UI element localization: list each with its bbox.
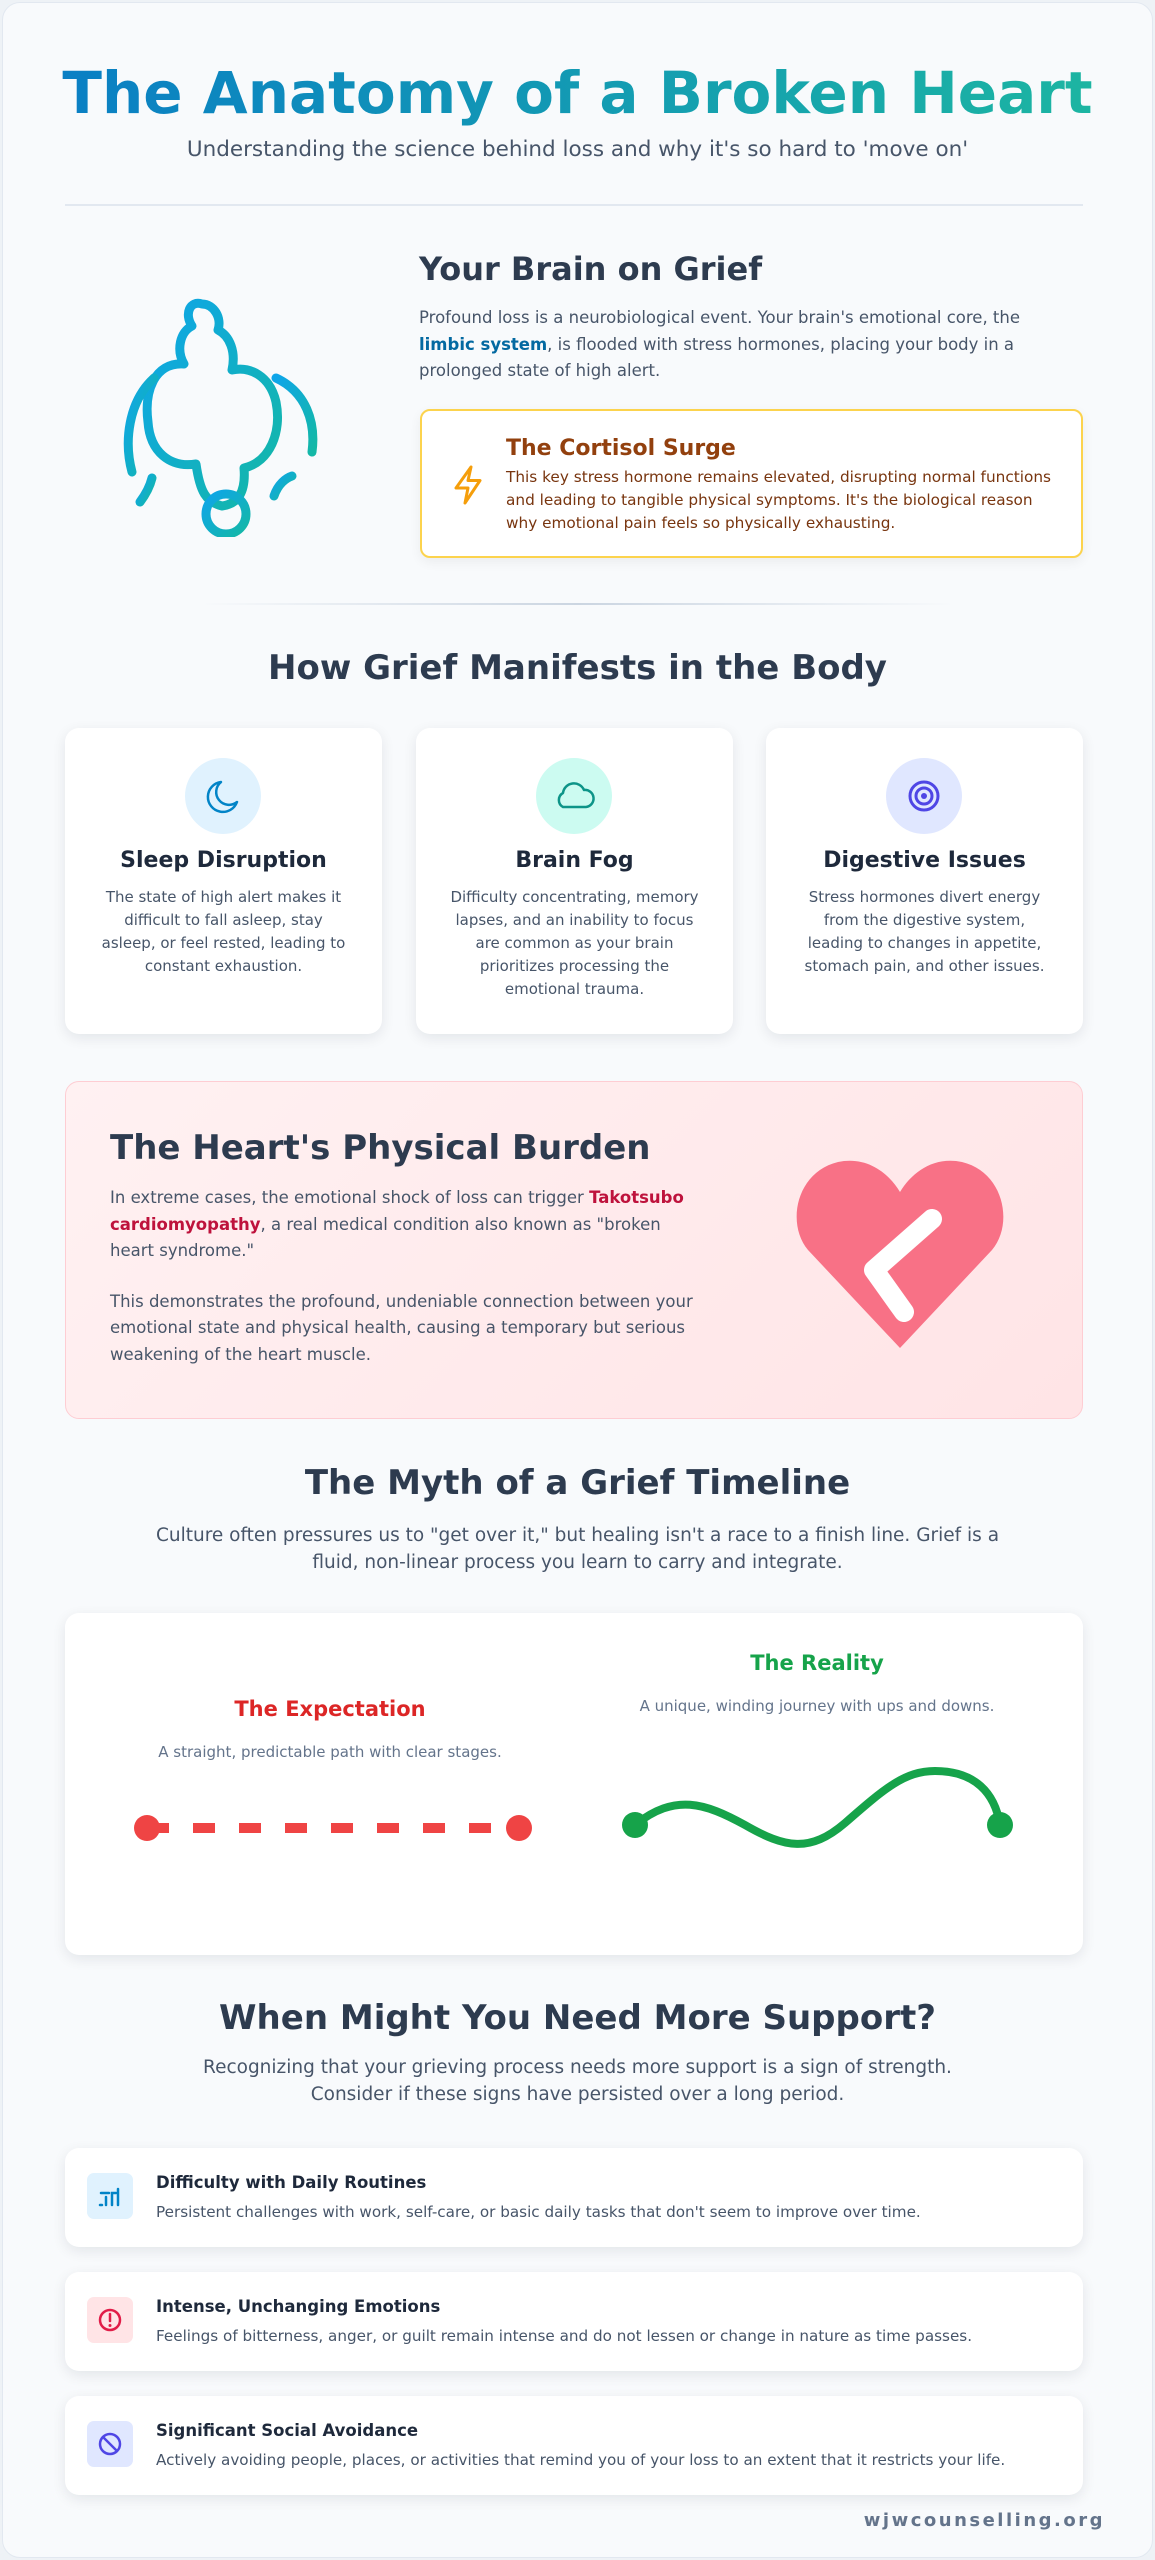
text: heart paragraphs <box>110 1188 693 1364</box>
heading: myth of grief timeline: The Myth of a Grief Timeline <box>305 1463 850 1503</box>
chart: straight dashed line <box>134 1815 532 1841</box>
panel: timeline comparison <box>65 1613 1083 1955</box>
icon: lightning <box>454 466 482 504</box>
icon: ban <box>87 2421 133 2467</box>
text: support intro: Recognizing that your grieving process needs more support is a sign of strength. <box>203 2057 952 2078</box>
icon: broken heart <box>796 1160 1004 1348</box>
text: heart paragraphs: This demonstrates the profound, undeniable connection between your emotional state and physical health, causing a temporary but serious weakening of the heart muscle. <box>110 1292 693 1364</box>
heading: how grief manifests: How Grief Manifests in the Body <box>268 648 887 688</box>
item: intense emotions <box>65 2272 1083 2371</box>
item: daily routines: Difficulty with Daily Routines <box>156 2173 426 2192</box>
panel: heart's physical burden <box>65 1081 1083 1419</box>
icon: brain <box>124 298 318 537</box>
expectation: The Expectation <box>234 1697 426 1721</box>
item: social avoidance: Significant Social Avoidance <box>156 2421 418 2440</box>
icon: target <box>886 758 962 834</box>
title: The Anatomy of a Broken Heart <box>62 59 1093 127</box>
panel: digestive issues: Digestive Issues <box>823 848 1026 873</box>
icon: chart <box>87 2173 133 2219</box>
text: support intro <box>203 2057 952 2105</box>
panel: brain fog: Brain Fog <box>515 848 634 873</box>
heading: need more support: When Might You Need More Support? <box>219 1998 936 2038</box>
item: daily routines <box>65 2148 1083 2247</box>
text: support intro: Consider if these signs have persisted over a long period. <box>311 2084 844 2105</box>
panel: timeline comparison: A straight, predictable path with clear stages. <box>158 1743 502 1761</box>
panel: brain fog: Difficulty concentrating, memory lapses, and an inability to focus are common as your brain prioritizes processing the emotional trauma. <box>450 888 699 998</box>
panel: brain fog <box>416 728 733 1034</box>
panel: sleep disruption: Sleep Disruption <box>120 848 327 873</box>
footer: wjwcounselling.org <box>864 2510 1105 2531</box>
panel: timeline comparison: A unique, winding journey with ups and downs. <box>640 1697 994 1715</box>
panel: digestive issues: Stress hormones divert energy from the digestive system, leading to changes in appetite, stomach pain, and other issues. <box>805 888 1044 975</box>
callout text: This key stress hormone remains elevated, disrupting normal functions and leading to tangible physical symptoms. It's the biological reason why emotional pain feels so physically exhausting. <box>506 468 1051 532</box>
item: daily routines: Persistent challenges with work, self-care, or basic daily tasks that don't seem to improve over time. <box>156 2203 921 2221</box>
icon: cloud <box>536 758 612 834</box>
reality: The Reality <box>750 1651 884 1675</box>
text: heart paragraphs: In extreme cases, the emotional shock of loss can trigger Takotsubo cardiomyopathy, a real medical condition also known as "broken heart syndrome." <box>110 1188 684 1260</box>
item: social avoidance <box>65 2396 1083 2495</box>
chart: winding line <box>622 1767 1013 1848</box>
panel: sleep disruption: The state of high alert makes it difficult to fall asleep, stay asleep, or feel rested, leading to constant exhaustion. <box>102 888 345 975</box>
icon: moon <box>185 758 261 834</box>
item: intense emotions: Feelings of bitterness, anger, or guilt remain intense and do not lessen or change in nature as time passes. <box>156 2327 972 2345</box>
callout: cortisol surge <box>420 409 1083 558</box>
item: social avoidance: Actively avoiding people, places, or activities that remind you of your loss to an extent that it restricts your life. <box>156 2451 1005 2469</box>
panel: digestive issues <box>766 728 1083 1034</box>
panel: sleep disruption <box>65 728 382 1034</box>
item: intense emotions: Intense, Unchanging Emotions <box>156 2297 440 2316</box>
callout title: The Cortisol Surge <box>506 436 736 461</box>
heading: your brain on grief: Your Brain on Grief <box>419 250 762 288</box>
icon: alert <box>87 2297 133 2343</box>
subtitle: Understanding the science behind loss and why it's so hard to 'move on' <box>187 137 968 162</box>
text: brain paragraph: Profound loss is a neurobiological event. Your brain's emotional core, the limbic system, is flooded with stress hormones, placing your body in a prolonged state of high alert. <box>419 308 1020 380</box>
heading: The Heart's Physical Burden <box>110 1128 651 1168</box>
text: timeline intro: Culture often pressures us to "get over it," but healing isn't a race to a finish line. Grief is a fluid, non-linear process you learn to carry and integrate. <box>156 1525 999 1573</box>
